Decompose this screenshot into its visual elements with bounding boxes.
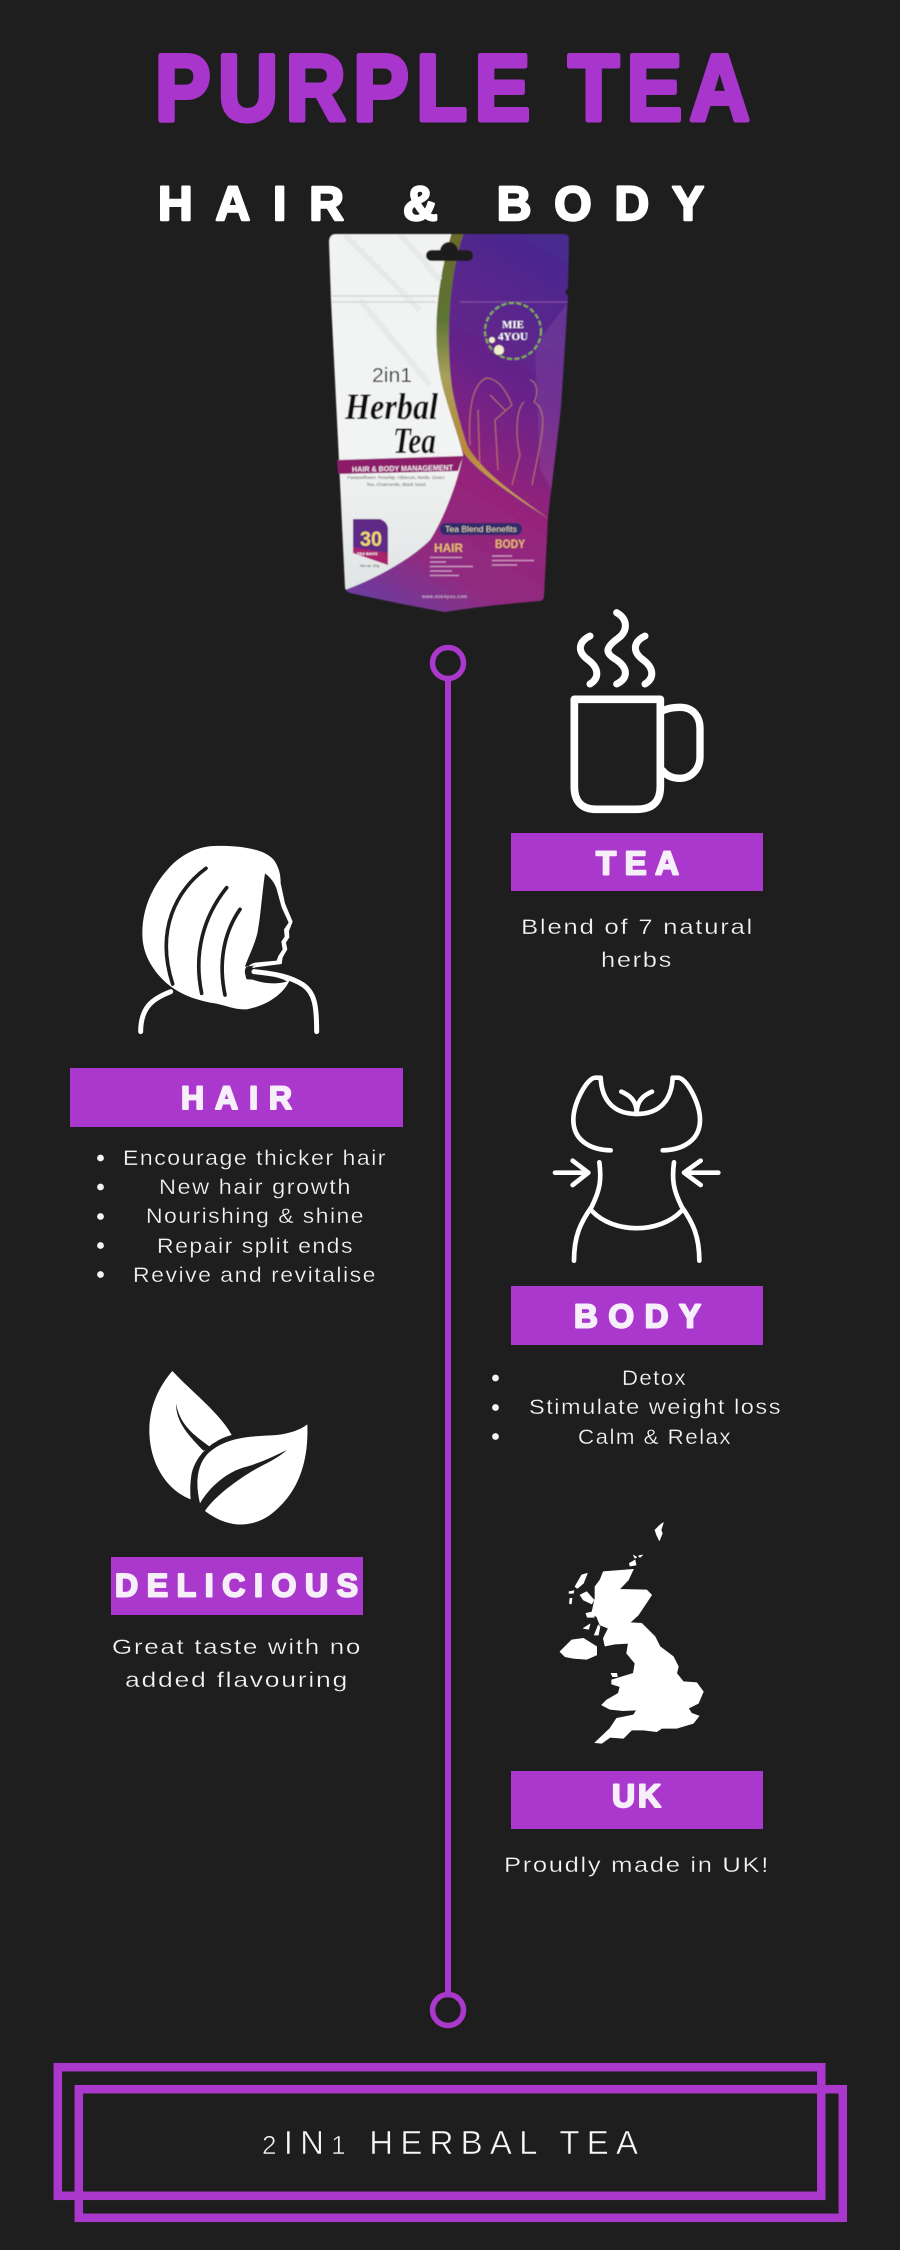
banner: uk — [511, 1771, 763, 1829]
text: delicious description — [112, 1635, 362, 1692]
panel: body — [492, 1078, 782, 1449]
title: PURPLE TEA — [155, 35, 750, 140]
list: hair benefits: Revive and revitalise — [133, 1263, 377, 1287]
pouch logo: 4YOU — [498, 331, 528, 343]
panel: uk — [504, 1523, 770, 1877]
pouch 30 tea bags badge: 30 — [360, 528, 382, 551]
banner: delicious — [111, 1557, 363, 1615]
icon: body waist — [555, 1078, 718, 1261]
banner: tea — [511, 833, 763, 891]
product pouch: Passionflower, Rosehip, Hibiscus, Nettle, Green — [347, 475, 445, 480]
product pouch: HAIR & BODY MANAGEMENT — [352, 463, 453, 474]
list: hair benefits: Encourage thicker hair — [123, 1146, 387, 1170]
pouch 30 tea bags badge: Net wt. 30g — [360, 564, 379, 568]
pouch logo: MIE — [502, 319, 524, 331]
icon: uk map — [560, 1523, 703, 1743]
hang hole — [426, 242, 473, 261]
text: tea description — [521, 915, 754, 972]
timeline — [432, 648, 464, 2026]
icon: tea cup — [574, 613, 700, 809]
footer frames — [58, 2067, 843, 2218]
label: tea: TEA — [596, 844, 679, 882]
list: hair benefits: Nourishing & shine — [146, 1204, 365, 1228]
icon: leaves — [149, 1371, 307, 1524]
pouch benefits: www.mie4you.com — [422, 594, 467, 599]
footer label: 2IN 1 HERBAL TEA — [262, 2124, 638, 2161]
list: body benefits — [492, 1366, 782, 1449]
icon: hair profile — [141, 846, 317, 1032]
banner: hair — [70, 1068, 403, 1127]
banner: body — [511, 1286, 763, 1345]
label: hair: HAIR — [181, 1080, 292, 1116]
panel: hair — [70, 846, 403, 1287]
list: hair benefits: Repair split ends — [157, 1234, 354, 1258]
text: uk description: Proudly made in UK! — [504, 1853, 770, 1877]
product pouch: Herbal — [344, 387, 439, 428]
text: tea description: herbs — [601, 948, 673, 972]
pouch benefits: Tea Blend Benefits — [445, 525, 517, 534]
pouch benefits — [422, 523, 534, 599]
product pouch: Tea, Chamomile, Black Seed — [367, 482, 426, 487]
pouch name: 2in1 — [372, 365, 412, 387]
list: body benefits: Detox — [622, 1366, 687, 1390]
subtitle: HAIR & BODY — [158, 178, 704, 231]
list: body benefits: Calm & Relax — [578, 1425, 732, 1449]
label: delicious: DELICIOUS — [115, 1568, 358, 1604]
list: hair benefits: New hair growth — [159, 1175, 352, 1199]
list: body benefits: Stimulate weight loss — [529, 1395, 782, 1419]
text: delicious description: Great taste with no — [112, 1635, 362, 1659]
label: body: BODY — [574, 1298, 701, 1334]
footer: 2in1 herbal tea — [58, 2067, 843, 2218]
panel: delicious — [111, 1371, 363, 1692]
pouch silhouettes — [470, 378, 543, 485]
list: hair benefits — [97, 1146, 387, 1287]
product pouch: Tea — [393, 421, 436, 462]
text: delicious description: added flavouring — [125, 1668, 349, 1692]
label: uk: UK — [612, 1778, 661, 1814]
pouch band — [337, 456, 463, 474]
pouch logo — [485, 303, 541, 359]
text: tea description: Blend of 7 natural — [521, 915, 754, 939]
pouch 30 tea bags badge: TEA BAGS — [357, 551, 378, 556]
panel: tea — [511, 613, 763, 972]
pouch benefits: HAIR — [434, 541, 463, 555]
pouch 30 tea bags badge — [353, 519, 388, 568]
product pouch — [328, 233, 570, 612]
pouch benefits: BODY — [495, 537, 525, 551]
